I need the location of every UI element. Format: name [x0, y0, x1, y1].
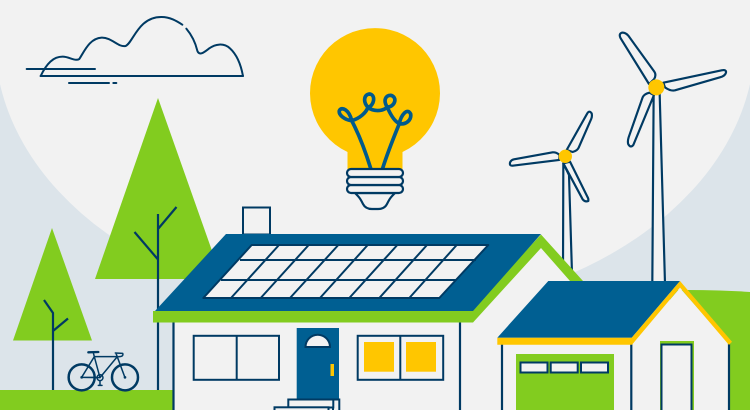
side door [660, 341, 694, 410]
blades [620, 33, 655, 84]
yellow eave and gable trim [497, 281, 732, 345]
solar panel [203, 245, 488, 298]
garage [497, 281, 732, 410]
wind turbine large [620, 33, 726, 283]
icon: chimney [243, 208, 270, 234]
house walls [173, 248, 600, 410]
icon: light bulb [310, 28, 440, 209]
green hill right [670, 290, 750, 410]
house [153, 234, 600, 410]
icon: cloud [27, 17, 243, 83]
bulb screw base [347, 169, 403, 209]
garage roof [497, 281, 680, 338]
icon: bicycle [69, 352, 138, 390]
right window [358, 336, 443, 380]
green gable trim [470, 234, 583, 322]
garage wall [502, 288, 729, 410]
steps [274, 400, 339, 410]
tree: large [95, 98, 222, 390]
green eave [153, 311, 476, 322]
tower [563, 163, 572, 273]
wind turbine small [510, 112, 592, 273]
tree: small [13, 228, 92, 390]
garage door [516, 354, 614, 410]
roof [155, 234, 541, 311]
filament [339, 94, 411, 168]
hub [648, 79, 664, 95]
ground left [0, 390, 174, 410]
tower [652, 93, 665, 283]
hub [559, 150, 572, 163]
door [297, 328, 339, 400]
bulb glass [310, 28, 440, 169]
blades [567, 112, 592, 152]
left window [194, 336, 279, 380]
